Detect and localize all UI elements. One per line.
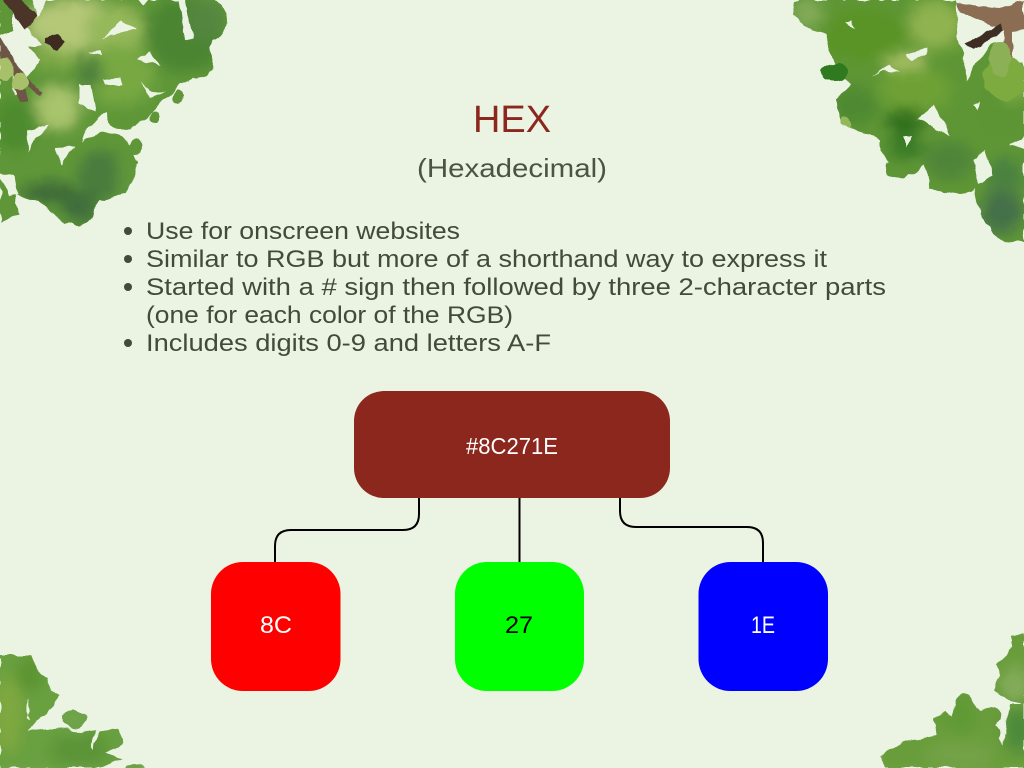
foliage branches [4,0,38,30]
green box: 27: 27 [505,612,533,639]
foliage: top left corner [0,0,228,226]
connector: to red box [275,498,419,562]
blue box: 1E: 1E [751,612,775,639]
parent box: full hex code: #8C271E [466,433,558,459]
connector: to blue box [620,498,763,562]
bullet list: Use for onscreen websites [146,218,460,245]
blue box: 1E [698,562,828,691]
bullet list: Similar to RGB but more of a shorthand way to express it [146,246,827,273]
foliage gaps [998,728,1004,745]
foliage gaps [26,698,102,750]
bullet list: Started with a # sign then followed by three 2-character parts [146,274,886,301]
foliage: bottom left corner [0,654,145,768]
bullet list: Includes digits 0-9 and letters A-F [146,330,551,357]
foliage: top right corner [793,0,1024,242]
bullet list: (one for each color of the RGB) [146,302,513,329]
subtitle: (Hexadecimal) [417,153,607,183]
foliage: bottom right corner [880,633,1024,768]
bullet list [124,218,886,357]
red box: 8C [211,562,340,691]
foliage branches [956,0,1024,60]
green box: 27 [455,562,584,691]
connector: to green box [518,498,520,562]
foliage gaps [845,0,1024,185]
parent box: full hex code [354,391,670,498]
title: HEX [473,99,551,141]
red box: 8C: 8C [260,612,292,639]
foliage gaps [0,0,193,197]
